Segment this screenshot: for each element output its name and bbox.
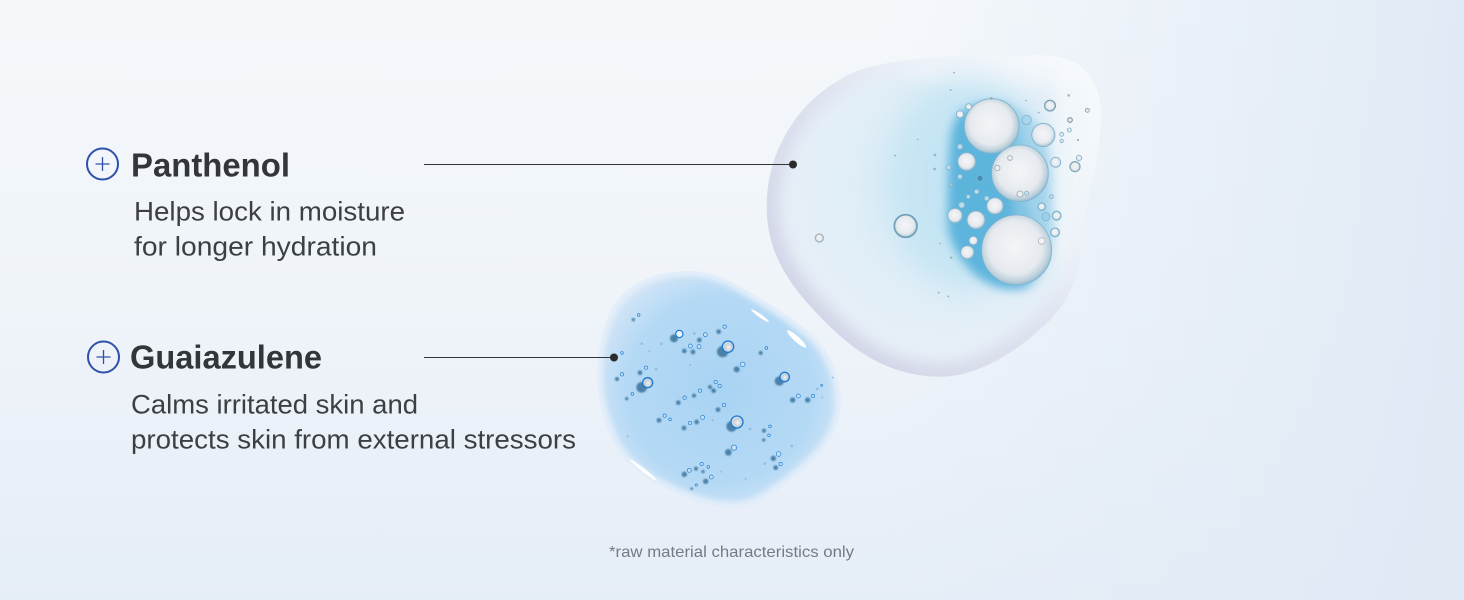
ringed bubbles xyxy=(620,314,823,486)
droplet: guaiazulene gel with bubbles xyxy=(597,271,841,507)
description: guaiazulene: Calms irritated skin and xyxy=(131,390,418,420)
description: guaiazulene: protects skin from external stressors xyxy=(131,424,576,454)
heading: Guaiazulene: Guaiazulene xyxy=(130,338,322,376)
dark bubble shadows xyxy=(615,318,810,490)
callout: panthenol xyxy=(87,146,797,262)
description: panthenol xyxy=(134,196,405,262)
bubble cluster xyxy=(815,99,1089,285)
heading: Panthenol: Panthenol xyxy=(131,146,290,184)
description: panthenol: for longer hydration xyxy=(134,232,377,262)
leader line: panthenol xyxy=(424,160,797,168)
faint specks xyxy=(627,332,834,480)
leader line: guaiazulene xyxy=(424,354,618,362)
description: guaiazulene xyxy=(131,390,576,454)
callout: guaiazulene xyxy=(88,338,618,454)
description: panthenol: Helps lock in moisture xyxy=(134,196,405,226)
tiny specks xyxy=(894,72,1079,297)
highlights xyxy=(629,308,808,482)
icon: plus in circle xyxy=(88,342,119,372)
droplet: panthenol serum with bubbles xyxy=(766,58,1101,377)
icon: plus in circle xyxy=(87,148,118,180)
footnote: *raw material characteristics only xyxy=(609,544,854,561)
